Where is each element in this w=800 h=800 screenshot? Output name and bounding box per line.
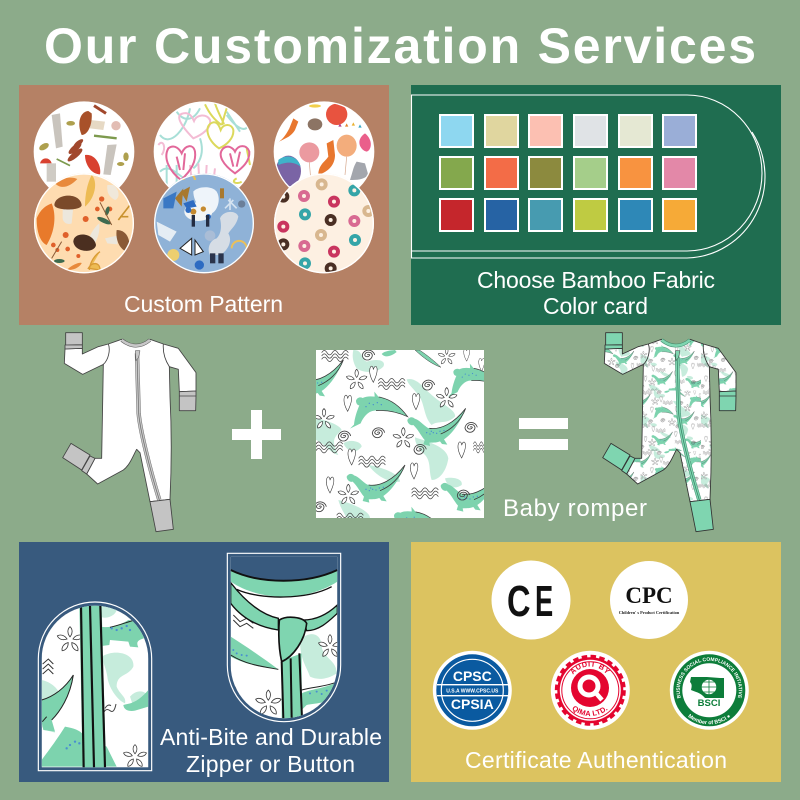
circle: pastel hearts	[154, 101, 254, 188]
badge: BSCI: BSCI	[698, 698, 720, 709]
equals sign	[519, 418, 568, 450]
plus sign	[232, 410, 281, 459]
badge: BSCI	[670, 650, 749, 730]
label: certificate authentication: Certificate Authentication	[465, 747, 727, 773]
title: Our Customization Services	[44, 18, 756, 74]
label: anti-bite and durable: Anti-Bite and Durable	[160, 724, 382, 750]
badge: CE: E	[535, 576, 553, 626]
badge: CE: C	[507, 577, 531, 626]
badge: CPSC CPSIA: CPSC	[453, 668, 492, 684]
badge: CPC: CPC	[625, 583, 673, 608]
circle: donuts	[274, 173, 374, 273]
panel: certificates	[411, 542, 781, 782]
dinosaur fabric swatch	[316, 350, 484, 518]
label: custom pattern: Custom Pattern	[124, 291, 283, 317]
circle: blue dinosaurs	[154, 173, 254, 273]
dinosaur print romper	[603, 333, 736, 532]
pattern circles	[34, 102, 374, 273]
badge: CE	[492, 560, 570, 640]
panel: zipper and button	[19, 542, 389, 782]
label: zipper or button: Zipper or Button	[186, 751, 355, 777]
badge: CPSC CPSIA: CPSIA	[451, 696, 494, 712]
badge: CPC	[610, 561, 688, 639]
badge: CPSC CPSIA: U.S.A WWW.CPSC.US	[446, 689, 499, 695]
badge: BSCI: Member of BSCI ●	[688, 714, 730, 724]
label: choose bamboo fabric: Choose Bamboo Fabric	[477, 267, 715, 293]
badge: QIMA audit: QIMA LTD.	[572, 706, 608, 716]
badge: CPSC CPSIA	[433, 651, 512, 730]
color swatches	[440, 115, 696, 231]
white blank romper	[63, 333, 196, 532]
label: color card: Color card	[543, 293, 648, 319]
circle: autumn mushrooms	[34, 173, 134, 273]
circle: forest mushrooms	[34, 101, 134, 188]
color card outline	[412, 95, 765, 258]
badge: CPC: Children' s Product Certification	[619, 610, 680, 615]
label: baby romper: Baby romper	[503, 495, 647, 522]
badge: QIMA audit	[550, 650, 630, 730]
badge: BSCI: BUSINESS SOCIAL COMPLIANCE INITIATIVE	[676, 657, 742, 698]
panel: custom pattern	[19, 85, 389, 325]
panel: bamboo fabric color card	[411, 85, 781, 325]
badge: QIMA audit: AUDIT BY	[571, 661, 610, 674]
button closeup arch	[227, 553, 342, 722]
zipper closeup arch	[38, 602, 152, 771]
circle: balloons and foxes	[274, 101, 374, 188]
